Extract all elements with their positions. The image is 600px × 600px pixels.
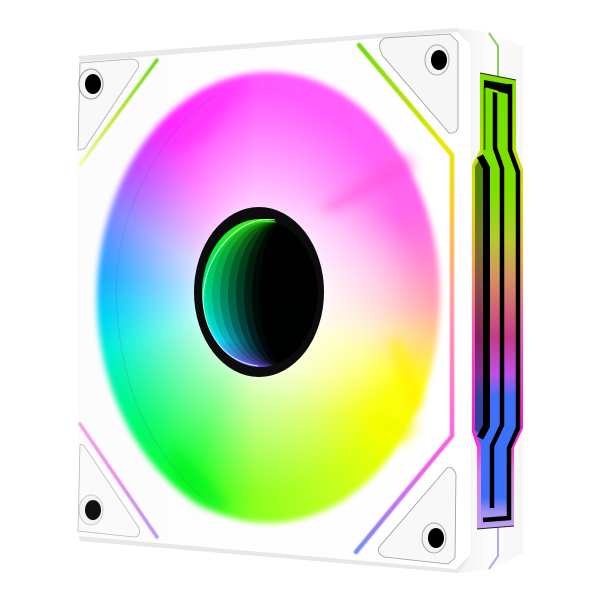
slot colour fill [475, 78, 520, 525]
side connector strip bottom [489, 527, 498, 569]
fan illustration [77, 28, 523, 573]
black stripe inner [492, 90, 502, 508]
side connector strip top [489, 33, 498, 76]
side rgb slot [472, 73, 523, 529]
led strip: left edge [77, 165, 80, 424]
led strip: lower left diagonal [80, 424, 157, 537]
blade highlights [165, 80, 424, 510]
bottom bevel [77, 530, 470, 573]
corner panel: bottom right [378, 467, 456, 564]
slot glow edge [472, 73, 523, 529]
screw: bottom right [422, 523, 446, 553]
side wall [455, 28, 523, 573]
hub black ring [194, 207, 324, 377]
corner panel: bottom left [78, 444, 139, 537]
upper left dark edge [484, 86, 486, 150]
infinity mirror [202, 219, 318, 367]
centre hub [194, 207, 325, 377]
led strip: upper left diagonal [80, 60, 157, 165]
black stripe left [480, 156, 486, 438]
rgb fan disc [92, 68, 444, 528]
screw: bottom left [79, 495, 103, 525]
led strip: upper and right edge [359, 45, 452, 434]
rainbow gradient [47, 22, 490, 573]
left channel shade [475, 155, 483, 436]
mirror highlight [203, 219, 275, 366]
corner panel: top left [78, 59, 139, 150]
blade outline arc [116, 95, 215, 495]
black stripe right [483, 84, 518, 520]
slot bottom outline [477, 526, 514, 529]
screw: top left [79, 69, 103, 99]
right side highlight [97, 72, 440, 523]
top bevel [79, 28, 470, 66]
led strip: lower right diagonal [356, 436, 452, 552]
top inner green band [487, 89, 498, 95]
corner panel: top right [380, 34, 458, 133]
slot top outline [480, 73, 516, 80]
screw: top right [425, 45, 449, 75]
slot dark top frame [484, 80, 512, 95]
foreground details [78, 32, 523, 570]
front face [77, 32, 470, 569]
white centre glow [97, 72, 440, 523]
